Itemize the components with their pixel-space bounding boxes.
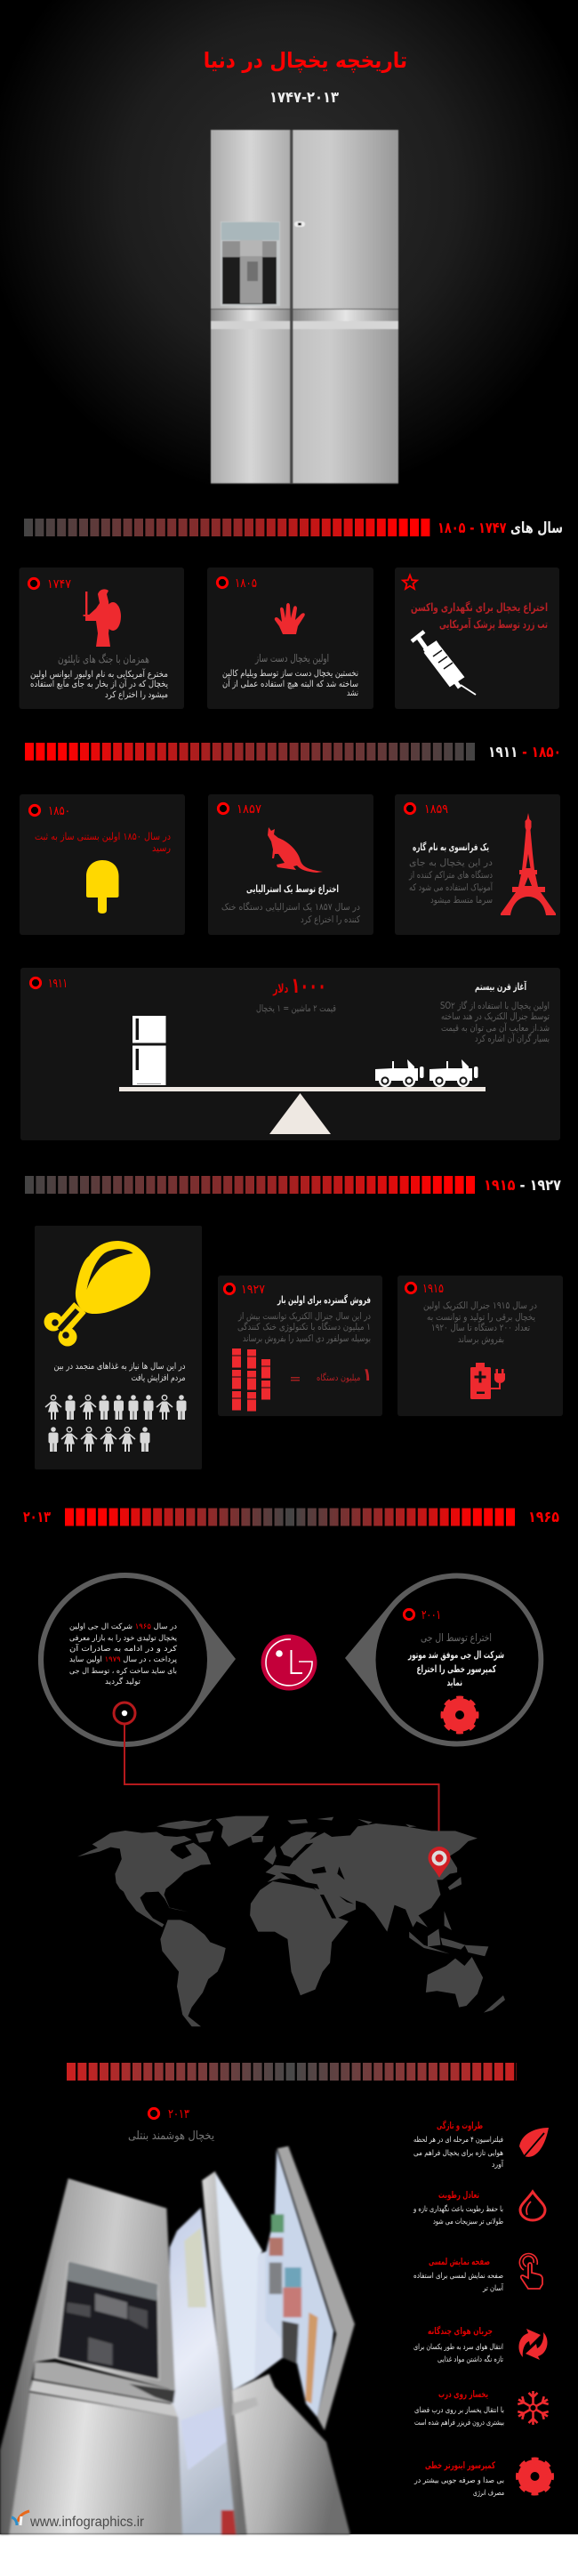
panel: 1747: همزمان با جنگ های ناپلئون [58, 653, 149, 666]
callout: LG 2001: ۲۰۰۱ [421, 1608, 441, 1622]
icon: refrigerator on scale [132, 1016, 165, 1085]
panel: 1927 [218, 1276, 382, 1416]
icon: airflow arrows [518, 2329, 548, 2360]
callout: LG 2001: نماید [446, 1677, 462, 1688]
feature: door ice maker: یخساز روی درب [438, 2389, 488, 2400]
timeline header: 1915-1927: ۱۹۲۷ - ۱۹۱۵ [484, 1177, 562, 1195]
icon: gear [518, 2459, 551, 2493]
panel: 1911: آغاز قرن بیستم [475, 980, 526, 993]
callout: LG 2001 [345, 1573, 543, 1746]
panel: 1927: فروش گسترده برای اولین بار [277, 1294, 371, 1306]
timeline header: 1747-1805: سال های ۱۷۴۷ - ۱۸۰۵ [438, 519, 563, 537]
panel: frozen food [35, 1226, 202, 1469]
callout: LG 1965: یخچال تولیدی خود را به بازار معرفی [69, 1634, 178, 1643]
icon: chicken leg [44, 1241, 150, 1347]
feature: humidity: تعادل رطوبت [438, 2190, 479, 2201]
panel: 1911: اولین یخچال با استفاده از گاز SO۲ [440, 1000, 550, 1011]
panel: 1859 [395, 794, 560, 935]
panel: 1911: بسیار گران آن اشاره کرد [475, 1033, 550, 1044]
panel: 1927: ۱۹۲۷ [241, 1283, 265, 1297]
feature: freshness: طراوت و تازگی [437, 2120, 483, 2131]
panel: 1805: نشد [347, 688, 358, 698]
hero refrigerator [211, 130, 398, 484]
callout: LG 2001: شرکت ال جی موفق شد موتور [407, 1649, 504, 1661]
feature: door ice maker: بیشتری درون فریزر فراهم شده است [414, 2419, 504, 2427]
icon: gear [443, 1698, 477, 1732]
marker: factory ring [114, 1703, 135, 1724]
feature: multi airflow [413, 2325, 548, 2364]
year label: 2013: یخچال هوشمند بنتلی [128, 2129, 214, 2143]
feature: door ice maker [414, 2389, 550, 2427]
icon: LG logo [261, 1635, 317, 1690]
panel: 1927: ۱ میلیون دستگاه [317, 1364, 372, 1385]
feature: freshness: هوایی تازه برای یخچال فراهم می [413, 2149, 503, 2158]
icon: two cars on scale [375, 1059, 478, 1087]
year label: 2013: ۲۰۱۳ [168, 2107, 189, 2121]
panel: 1927: ۱ میلیون دستگاه با تکنولوژی خنک کنندگی [237, 1321, 371, 1332]
balance scale [119, 1087, 486, 1134]
panel: 1911: ۱۰۰۰ دلار [272, 973, 326, 998]
panel: 1805: نخستین یخچال دست ساز توسط ویلیام کالین [222, 669, 358, 679]
callout: LG 1965: در سال ۱۹۶۵ شرکت ال جی اولین [69, 1622, 177, 1631]
feature: multi airflow: جریان هوای چندگانه [428, 2325, 493, 2337]
icon: warrior [84, 589, 121, 647]
feature: linear compressor [413, 2459, 551, 2498]
panel: 1747: ۱۷۴۷ [47, 577, 71, 592]
icon: eiffel tower [501, 813, 556, 915]
panel: vaccine [395, 568, 559, 709]
panel: 1850: ۱۸۵۰ [48, 804, 70, 818]
icon: snowflake [517, 2391, 550, 2425]
timeline header: 1965-2013 [23, 1509, 559, 1526]
panel: 1859: دستگاه های متراکم کننده از [408, 869, 493, 881]
icon: kangaroo [268, 827, 323, 873]
callout: LG 2001: کمپرسور خطی را اختراع [416, 1663, 496, 1675]
feature: multi airflow: تازه نگه داشتن مواد غذایی [438, 2355, 503, 2364]
panel: 1927: در این سال جنرال الکتریک توانست بیش از [237, 1311, 371, 1322]
panel: 1911: ۱۹۱۱ [48, 977, 68, 991]
feature: linear compressor: مصرف انرژی [473, 2489, 504, 2498]
feature: humidity [413, 2190, 545, 2226]
connector line [124, 1725, 439, 1848]
timeline bar: 2013 [67, 2063, 517, 2081]
feature: freshness: فیلتراسیون ۴ مرحله ای در هر لحظه [413, 2136, 503, 2145]
feature: multi airflow: انتقال هوای سرد به طور یکسان برای [413, 2343, 503, 2352]
panel: 1915: بفروش برساند [458, 1334, 504, 1345]
callout: LG 1965 [38, 1573, 236, 1747]
icon: leaf [519, 2128, 549, 2159]
feature: touch display [413, 2254, 542, 2293]
years subtitle: ۱۷۴۷-۲۰۱۳ [269, 89, 340, 107]
panel: 1915 [397, 1276, 563, 1416]
icon: syringe [412, 632, 476, 695]
panel: 1911 [20, 968, 560, 1140]
panel: 1805: اولین یخچال دست ساز [254, 652, 329, 665]
panel: 1805: ۱۸۰۵ [235, 576, 257, 591]
panel: 1747 [20, 568, 184, 709]
panel: 1857: اختراع توسط یک استرالیایی [246, 883, 339, 895]
panel: 1915: ۱۹۱۵ [422, 1282, 444, 1296]
panel: 1859: آمونیاک استفاده می شود که [409, 881, 494, 893]
text: website: www.infographics.ir [29, 2515, 144, 2530]
feature: touch display: صفحه نمایش لمسی برای استفاده [413, 2272, 503, 2281]
panel: 1747: یخچال که در آن از بخار به جای مایع استفاده [30, 678, 168, 689]
panel: 1857: کننده را اختراع کرد [301, 914, 360, 925]
world map [77, 1816, 505, 2026]
panel: 1859: در این یخچال به جای [409, 857, 493, 868]
feature: door ice maker: با انتقال یخساز بر روی درب فضای [414, 2406, 504, 2415]
panel: 1850: رسید [152, 842, 171, 854]
panel: 1859: یک فرانسوی به نام گاره [413, 841, 489, 853]
feature: humidity: طولانی تر سبزیجات می شود [433, 2218, 503, 2226]
year label: 2013 [128, 2107, 214, 2143]
icon: map pin [429, 1847, 450, 1878]
icon: battery and plug [470, 1363, 505, 1399]
panel: 1859: ۱۸۵۹ [424, 802, 448, 817]
feature: linear compressor: کمپرسور اینورتر خطی [425, 2460, 496, 2471]
feature: touch display: آسان تر [482, 2282, 504, 2293]
panel: 1915: یخچال برقی را تولید و توانست به [427, 1312, 535, 1323]
feature: humidity: با حفظ رطوبت باعث نگهداری تازه و [413, 2204, 503, 2214]
callout: LG 1965: تولید گردید [105, 1677, 141, 1686]
feature: freshness: آورد [492, 2159, 504, 2169]
people pictogram [45, 1395, 187, 1452]
timeline header: 1965-2013: ۲۰۱۳ [23, 1509, 51, 1526]
feature: touch display: صفحه نمایش لمسی [429, 2257, 490, 2267]
panel: 1805: ساخته شد که البته هیچ استفاده عملی از آن [222, 678, 358, 689]
callout: LG 1965: پرداخت ، در سال ۱۹۷۹ اولین ساید [69, 1655, 178, 1664]
panel: 1859: سرما متسط میشود [430, 895, 493, 906]
icon: hand [275, 603, 305, 634]
icon: water drop [520, 2192, 545, 2220]
panel: 1747: میشود را اختراع کرد [105, 690, 168, 700]
smart refrigerator image [0, 2146, 355, 2534]
icon: site logo [12, 2511, 29, 2525]
unit blocks [232, 1348, 270, 1411]
panel: 1927: بوسیله سولفور دی اکسید را بفروش برساند [243, 1333, 371, 1344]
icon: popsicle [86, 860, 119, 914]
panel: 1911: شد.از معایب آن می توان به قیمت [441, 1022, 550, 1034]
icon: touch [519, 2254, 542, 2289]
callout: LG 1965: بای ساید ساخت کره ، توسط ال جی [69, 1667, 177, 1676]
feature: freshness [413, 2120, 549, 2169]
title: تاریخچه یخچال در دنیا [204, 49, 407, 73]
panel: 1850 [20, 794, 185, 935]
panel: 1915: در سال ۱۹۱۵ جنرال الکتریک اولین [423, 1300, 537, 1311]
panel: 1747: مخترع آمریکایی به نام اولیور ایوانس اولین [30, 668, 168, 680]
feature: linear compressor: بی صدا و صرفه جویی بیشتر در [413, 2476, 504, 2485]
panel: 1911: قیمت ۲ ماشین = ۱ یخچال [256, 1003, 336, 1014]
timeline header: 1850-1911: ۱۸۵۰ - ۱۹۱۱ [488, 744, 561, 761]
panel: 1857 [208, 794, 373, 935]
panel: frozen food: مردم افزایش یافت [132, 1373, 185, 1383]
callout: LG 2001: اختراع توسط ال جی [421, 1631, 492, 1645]
callout: LG 1965: کرد و در ادامه به صادرات آن [69, 1643, 178, 1654]
icon: star [403, 575, 417, 589]
panel: 1857: در سال ۱۸۵۷ یک استرالیایی دستگاه خنک [221, 901, 360, 913]
timeline header: 1965-2013: ۱۹۶۵ [528, 1509, 559, 1526]
panel: 1911: توسط جنرال الکتریک در هند ساخته [441, 1011, 550, 1022]
panel: 1805 [207, 568, 373, 709]
panel: 1850: در سال ۱۸۵۰ اولین بستنی ساز به ثبت [35, 831, 171, 842]
panel: 1857: ۱۸۵۷ [237, 802, 261, 817]
panel: 1915: تعداد ۲۰۰ دستگاه تا سال ۱۹۲۰ [431, 1322, 530, 1333]
panel: frozen food: در این سال ها نیاز به غذاهای منجمد در بین [53, 1362, 185, 1372]
panel: hero [0, 0, 578, 485]
